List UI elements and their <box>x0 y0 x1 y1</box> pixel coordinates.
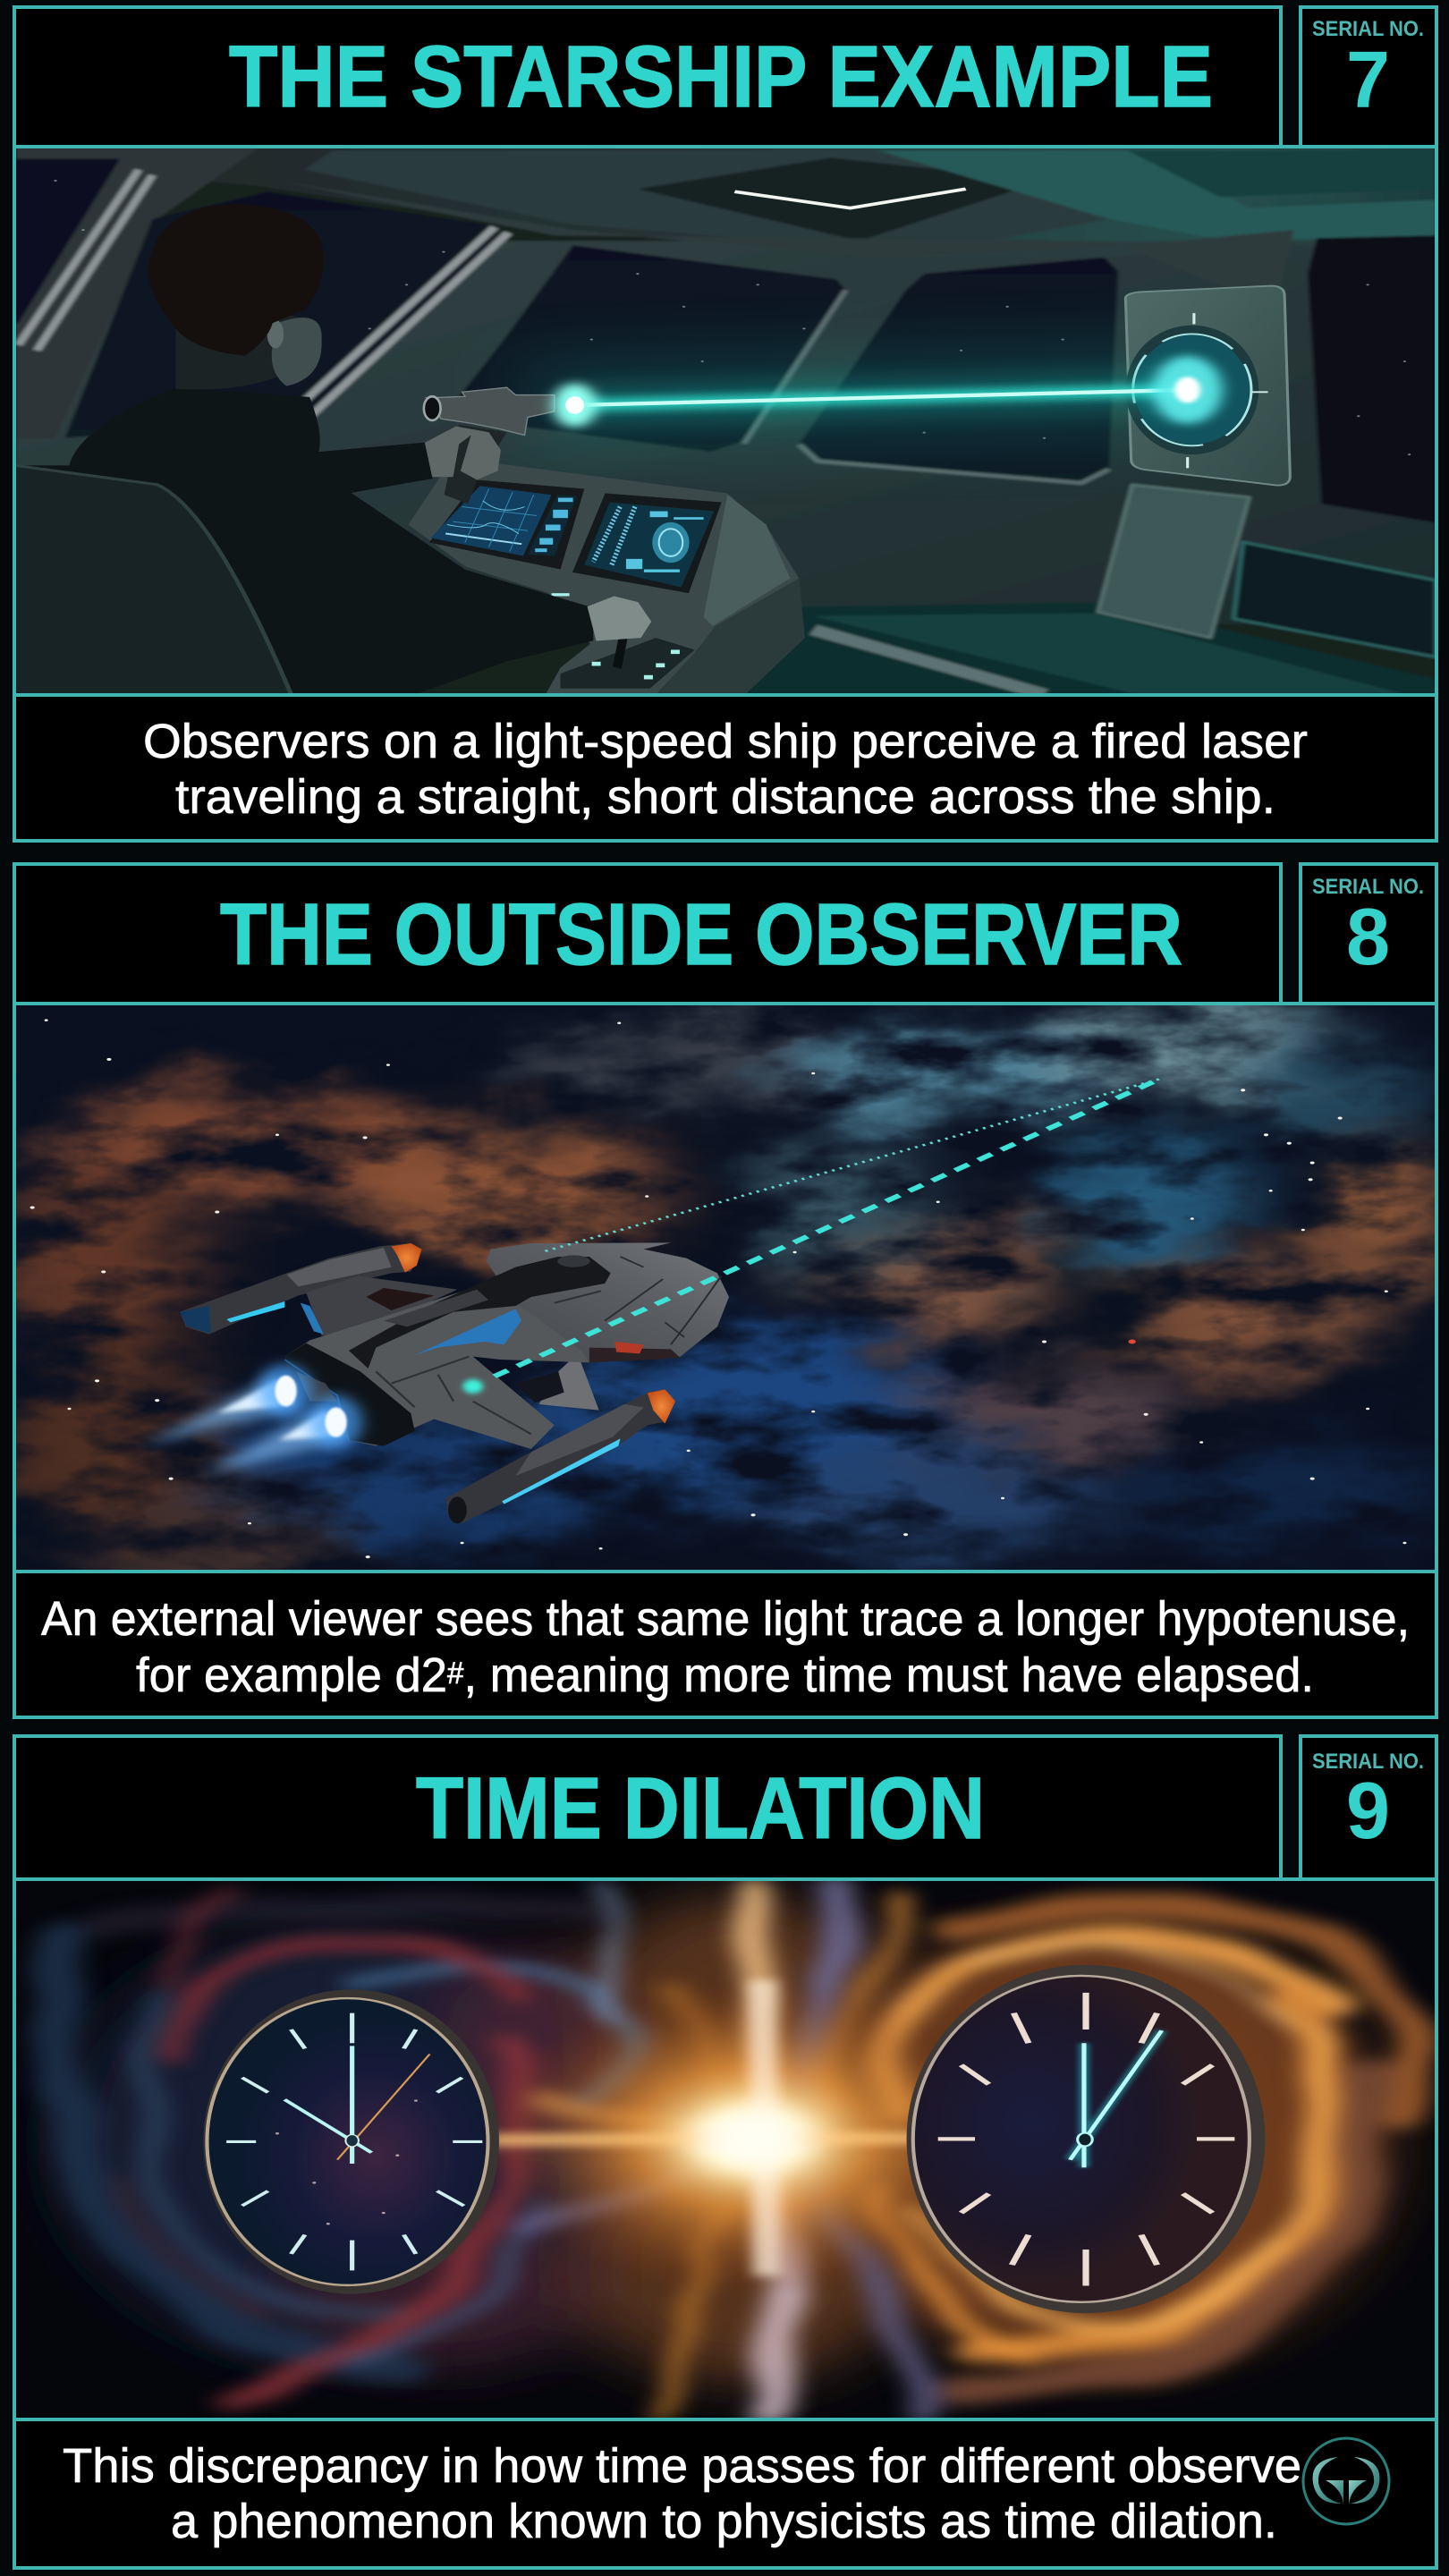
saucer hull <box>487 1242 729 1362</box>
emitter flare <box>462 1379 483 1394</box>
caption: traveling a straight, short distance across the ship. <box>175 770 1275 824</box>
serial number 9: SERIAL NO. <box>1312 1750 1424 1774</box>
caption: for example d2 <box>136 1648 455 1702</box>
title bar: TIME DILATION <box>416 1759 985 1857</box>
caption: # <box>447 1657 464 1690</box>
engine exhausts <box>143 1375 345 1476</box>
serial number 8 <box>1301 864 1436 1004</box>
lower nacelle <box>445 1389 675 1523</box>
engine block <box>284 1343 415 1446</box>
cabin walls, ceiling and windows <box>15 147 1436 694</box>
caption: , meaning more time must have elapsed. <box>463 1648 1314 1702</box>
ceiling light <box>734 189 966 208</box>
serial number 8: 8 <box>1346 893 1390 982</box>
stars <box>30 1019 1407 1558</box>
caption: This discrepancy in how time passes for different observe <box>63 2439 1301 2493</box>
serial number 9: 9 <box>1346 1767 1390 1856</box>
panel: the starship example <box>14 7 1436 841</box>
slow clock on the left <box>203 1989 499 2294</box>
pilot's console <box>409 463 805 694</box>
central light burst <box>485 1980 1021 2298</box>
caption: Observers on a light-speed ship perceive a fired laser <box>143 715 1308 768</box>
lower strut <box>515 1353 599 1411</box>
warped spacetime swirls <box>50 1887 1414 2412</box>
engine glow <box>258 1364 362 1449</box>
laser beam <box>553 356 1223 428</box>
title bar <box>14 864 1281 1004</box>
soft colour wash <box>64 1893 1377 2385</box>
light paths: dotted and dashed lines <box>495 1079 1160 1377</box>
control pad <box>552 593 695 689</box>
seat <box>15 465 291 694</box>
nebula clouds <box>9 1012 1449 1576</box>
main body <box>284 1286 589 1449</box>
right display <box>572 494 722 593</box>
serial number 7 <box>1301 7 1436 147</box>
panel: the outside observer <box>9 864 1449 1717</box>
top nacelle <box>180 1243 421 1335</box>
serial number 9 <box>1301 1736 1436 1879</box>
stars in windows <box>54 180 1411 455</box>
caption <box>14 1572 1436 1717</box>
title bar: THE OUTSIDE OBSERVER <box>220 886 1182 983</box>
pilot seen from behind <box>15 204 593 694</box>
title bar <box>14 1736 1281 1879</box>
illustration: starship in nebula with light paths <box>9 1005 1449 1576</box>
title bar: THE STARSHIP EXAMPLE <box>229 28 1213 125</box>
fast clock on the right <box>907 1965 1265 2313</box>
laser pistol and hands <box>424 387 651 640</box>
serial number 7: SERIAL NO. <box>1312 17 1424 41</box>
serial number 7: 7 <box>1346 36 1390 125</box>
icon: round watermark logo <box>1303 2438 1389 2524</box>
teal haze from laser <box>518 390 1201 408</box>
laser target panel <box>1125 286 1290 486</box>
serial number 8: SERIAL NO. <box>1312 875 1424 899</box>
panel: time dilation <box>14 1736 1436 2568</box>
starship <box>143 1242 729 1523</box>
illustration: two clocks in warped spacetime <box>15 1880 1436 2419</box>
left display <box>429 480 584 570</box>
caption <box>14 2419 1436 2568</box>
illustration: pilot firing laser inside starship <box>15 147 1436 694</box>
title bar <box>14 7 1281 147</box>
caption: a phenomenon known to physicists as time dilation. <box>171 2495 1277 2548</box>
caption <box>14 695 1436 841</box>
upper strut <box>301 1276 457 1335</box>
caption: An external viewer sees that same light trace a longer hypotenuse, <box>41 1592 1410 1646</box>
